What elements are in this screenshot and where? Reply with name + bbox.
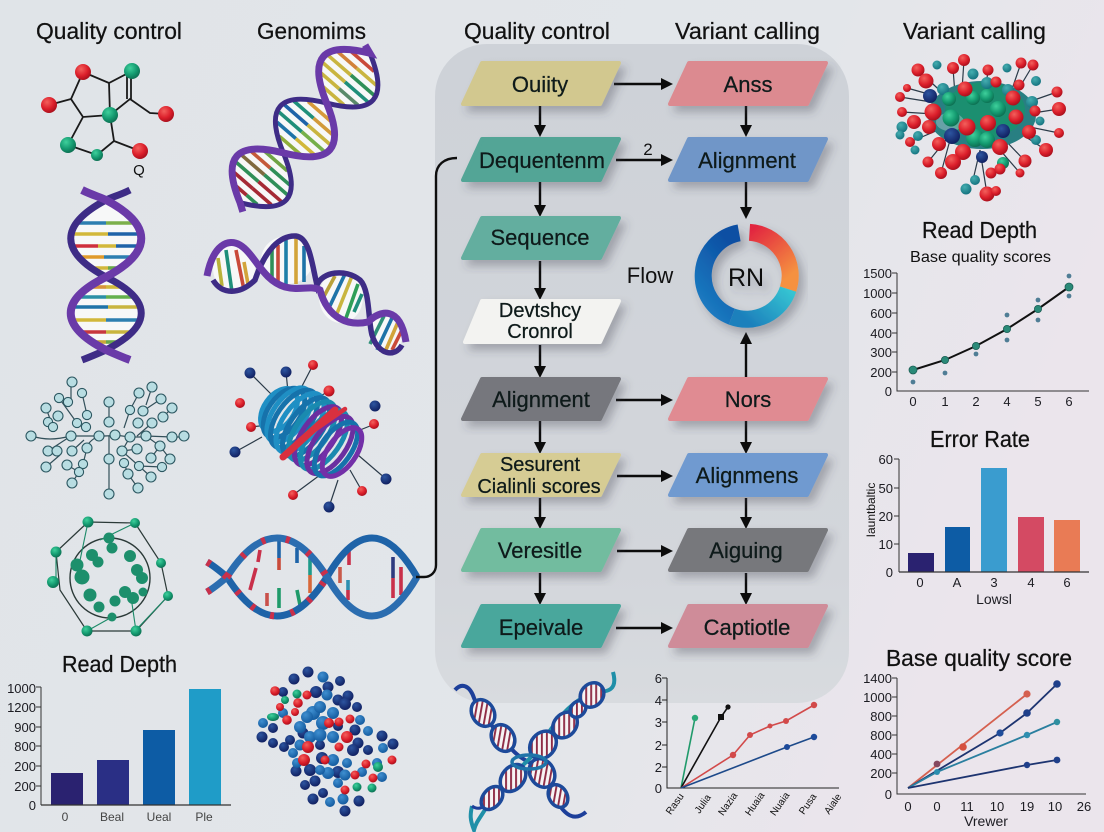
bar chart: error rate: A	[953, 575, 962, 590]
bar chart: error rate: 3	[990, 575, 998, 590]
flow step: Devtshcy Cronrol: Devtshcy	[499, 300, 581, 322]
connector: helix to sequencing step	[416, 158, 457, 577]
bar chart: error rate: Iauntbaltic	[864, 483, 878, 537]
icon: variant molecule cluster	[895, 54, 1066, 202]
bar chart: error rate: 0	[916, 575, 924, 590]
line chart: small multi-series: Nuaia	[768, 790, 793, 818]
title: Variant calling (right): Variant calling	[903, 18, 1046, 44]
line chart: small multi-series: Rasu	[664, 792, 687, 817]
icon: small molecule: Q	[133, 162, 145, 179]
line chart: base quality score: Vrewer	[964, 813, 1008, 829]
line chart: small multi-series: Huaia	[743, 790, 768, 818]
bar chart: read depth: 0	[29, 798, 36, 813]
bar chart: error rate: Lowsl	[976, 591, 1012, 607]
flow step: Ouiity	[463, 63, 619, 104]
line chart: base quality scores: 6	[1065, 394, 1073, 409]
flow step: Captiotle	[670, 606, 826, 646]
flow step: Ouiity: Ouiity	[512, 72, 568, 97]
bar chart: read depth: Ueal	[147, 810, 171, 824]
line chart: small multi-series: Nazia	[717, 790, 740, 818]
flow step: Aiguing	[670, 530, 826, 570]
flow step: Anss: Anss	[724, 72, 772, 97]
title: Quality control (left): Quality control	[36, 18, 182, 44]
title: Read Depth (left): Read Depth	[62, 651, 177, 677]
bar chart: error rate: 50	[879, 481, 893, 496]
flow step: Dequentenm: Dequentenm	[479, 148, 605, 173]
flow step: Sequence	[463, 218, 619, 258]
bar chart: read depth: Ple	[195, 810, 213, 824]
line chart: base quality scores: 600	[870, 306, 892, 321]
line chart: base quality scores: 5	[1034, 394, 1042, 409]
line chart: base quality scores: 2	[972, 394, 980, 409]
line chart: base quality scores: 0	[885, 384, 892, 399]
line chart: base quality score: 11	[960, 799, 974, 814]
arrow label: 2: 2	[643, 140, 653, 159]
bar chart: read depth: 200	[14, 759, 36, 774]
bar chart: read depth: 900	[14, 720, 36, 735]
flow step: Veresitle: Veresitle	[498, 538, 582, 563]
flow step: Sequence: Sequence	[490, 225, 590, 250]
title: Quality control (centre): Quality control	[464, 18, 610, 44]
line chart: small multi-series: 2	[655, 760, 662, 775]
title: Genomims: Genomims	[257, 18, 366, 44]
subtitle: Base quality scores: Base quality scores	[910, 249, 1051, 266]
flow step: Devtshcy Cronrol: Cronrol	[507, 321, 573, 343]
line chart: base quality scores: 1500	[863, 266, 892, 281]
donut chart: RN	[703, 232, 790, 319]
label: Flow: Flow	[627, 263, 673, 288]
line chart: base quality scores	[863, 266, 1089, 409]
line chart: base quality score: 0	[933, 799, 941, 814]
line chart: base quality score: 10	[1048, 799, 1062, 814]
flow step: Aiguing: Aiguing	[709, 538, 783, 563]
bar chart: error rate: 4	[1027, 575, 1035, 590]
line chart: base quality score: 19	[1020, 799, 1034, 814]
line chart: small multi-series: 0	[655, 781, 662, 796]
line chart: base quality score: 1000	[863, 690, 892, 705]
line chart: base quality score: 200	[870, 766, 892, 781]
line chart: base quality score	[863, 671, 1091, 829]
title: Error Rate: Error Rate	[930, 426, 1030, 452]
line chart: small multi-series: 2	[655, 738, 662, 753]
bar chart: read depth: 800	[14, 739, 36, 754]
icon: molecule cloud (blue)	[256, 666, 398, 816]
line chart: base quality scores: 400	[870, 326, 892, 341]
bar chart: error rate: 60	[879, 452, 893, 467]
icon: green ring molecule	[47, 516, 173, 636]
icon: crossed DNA helices	[455, 672, 614, 830]
line chart: base quality score: 0	[885, 787, 892, 802]
icon: branching tree network	[26, 377, 189, 499]
line chart: base quality score: 10	[990, 799, 1004, 814]
bar chart: error rate: 6	[1063, 575, 1071, 590]
icon: vertical DNA helix	[71, 190, 141, 360]
flow step: Alignment blue	[670, 139, 826, 180]
line chart: small multi-series: 4	[655, 693, 662, 708]
line chart: small multi-series: 3	[655, 715, 662, 730]
bar chart: read depth	[7, 681, 231, 824]
flow step: Anss	[670, 63, 826, 104]
flow step: Alignment grey: Alignment	[492, 387, 590, 412]
icon: blue DNA helix	[207, 538, 417, 616]
flow step: Captiotle: Captiotle	[704, 615, 790, 640]
line chart: base quality score: 0	[904, 799, 912, 814]
line chart: base quality score: 26	[1077, 799, 1091, 814]
flow step: Dequentenm	[463, 139, 619, 180]
flow step: Nors: Nors	[725, 387, 771, 412]
bar chart: error rate	[864, 452, 1089, 607]
bar chart: error rate: 0	[886, 565, 893, 580]
flow step: Alignment grey	[463, 379, 619, 419]
line chart: small multi-series: Julia	[693, 792, 714, 816]
bar chart: read depth: 1200	[7, 700, 36, 715]
line chart: base quality scores: 1000	[863, 286, 892, 301]
bar chart: read depth: 200	[14, 779, 36, 794]
flow step: Alignmens: Alignmens	[696, 463, 798, 488]
bar chart: read depth: 0	[62, 810, 69, 824]
line chart: base quality scores: 300	[870, 345, 892, 360]
line chart: base quality scores: 200	[870, 365, 892, 380]
line chart: base quality scores: 1	[941, 394, 949, 409]
bar chart: read depth: Beal	[100, 810, 124, 824]
line chart: small multi-series: Pusa	[797, 791, 820, 817]
flow step: Sesurent Cialinli scores: Sesurent	[500, 454, 580, 476]
donut chart: RN: RN	[728, 264, 764, 292]
icon: diagonal DNA helix	[212, 29, 397, 228]
line chart: small multi-series	[655, 671, 845, 818]
flow arrows	[534, 78, 752, 634]
bar chart: error rate: 10	[879, 537, 893, 552]
line chart: base quality scores: 4	[1003, 394, 1011, 409]
icon: small molecule	[41, 63, 174, 179]
title: Read Depth (right): Read Depth	[922, 217, 1037, 243]
title: Variant calling (centre): Variant calling	[675, 18, 820, 44]
line chart: base quality score: 400	[870, 747, 892, 762]
flow step: Nors	[670, 379, 826, 419]
line chart: small multi-series: Aiale	[823, 792, 845, 817]
line chart: small multi-series: 6	[655, 671, 662, 686]
flow step: Sesurent Cialinli scores	[463, 454, 619, 498]
line chart: base quality score: 800	[870, 709, 892, 724]
panel: central workflow background	[435, 44, 849, 703]
line chart: base quality score: 800	[870, 728, 892, 743]
icon: coiled protein with ball stems	[230, 360, 392, 512]
line chart: base quality scores: 0	[909, 394, 917, 409]
flow step: Epeivale: Epeivale	[499, 615, 583, 640]
flow step: Alignmens	[670, 455, 826, 495]
bar chart: read depth: 1000	[7, 681, 36, 696]
flow step: Devtshcy Cronrol	[465, 300, 619, 343]
flow step: Epeivale	[463, 606, 619, 646]
flow step: Alignment blue: Alignment	[698, 148, 796, 173]
icon: wavy DNA helix	[207, 236, 406, 354]
bar chart: error rate: 20	[879, 509, 893, 524]
title: Base quality score: Base quality score	[886, 645, 1072, 671]
flow step: Sesurent Cialinli scores: Cialinli scores	[477, 476, 601, 498]
flow step: Veresitle	[463, 530, 619, 570]
line chart: base quality score: 1400	[863, 671, 892, 686]
